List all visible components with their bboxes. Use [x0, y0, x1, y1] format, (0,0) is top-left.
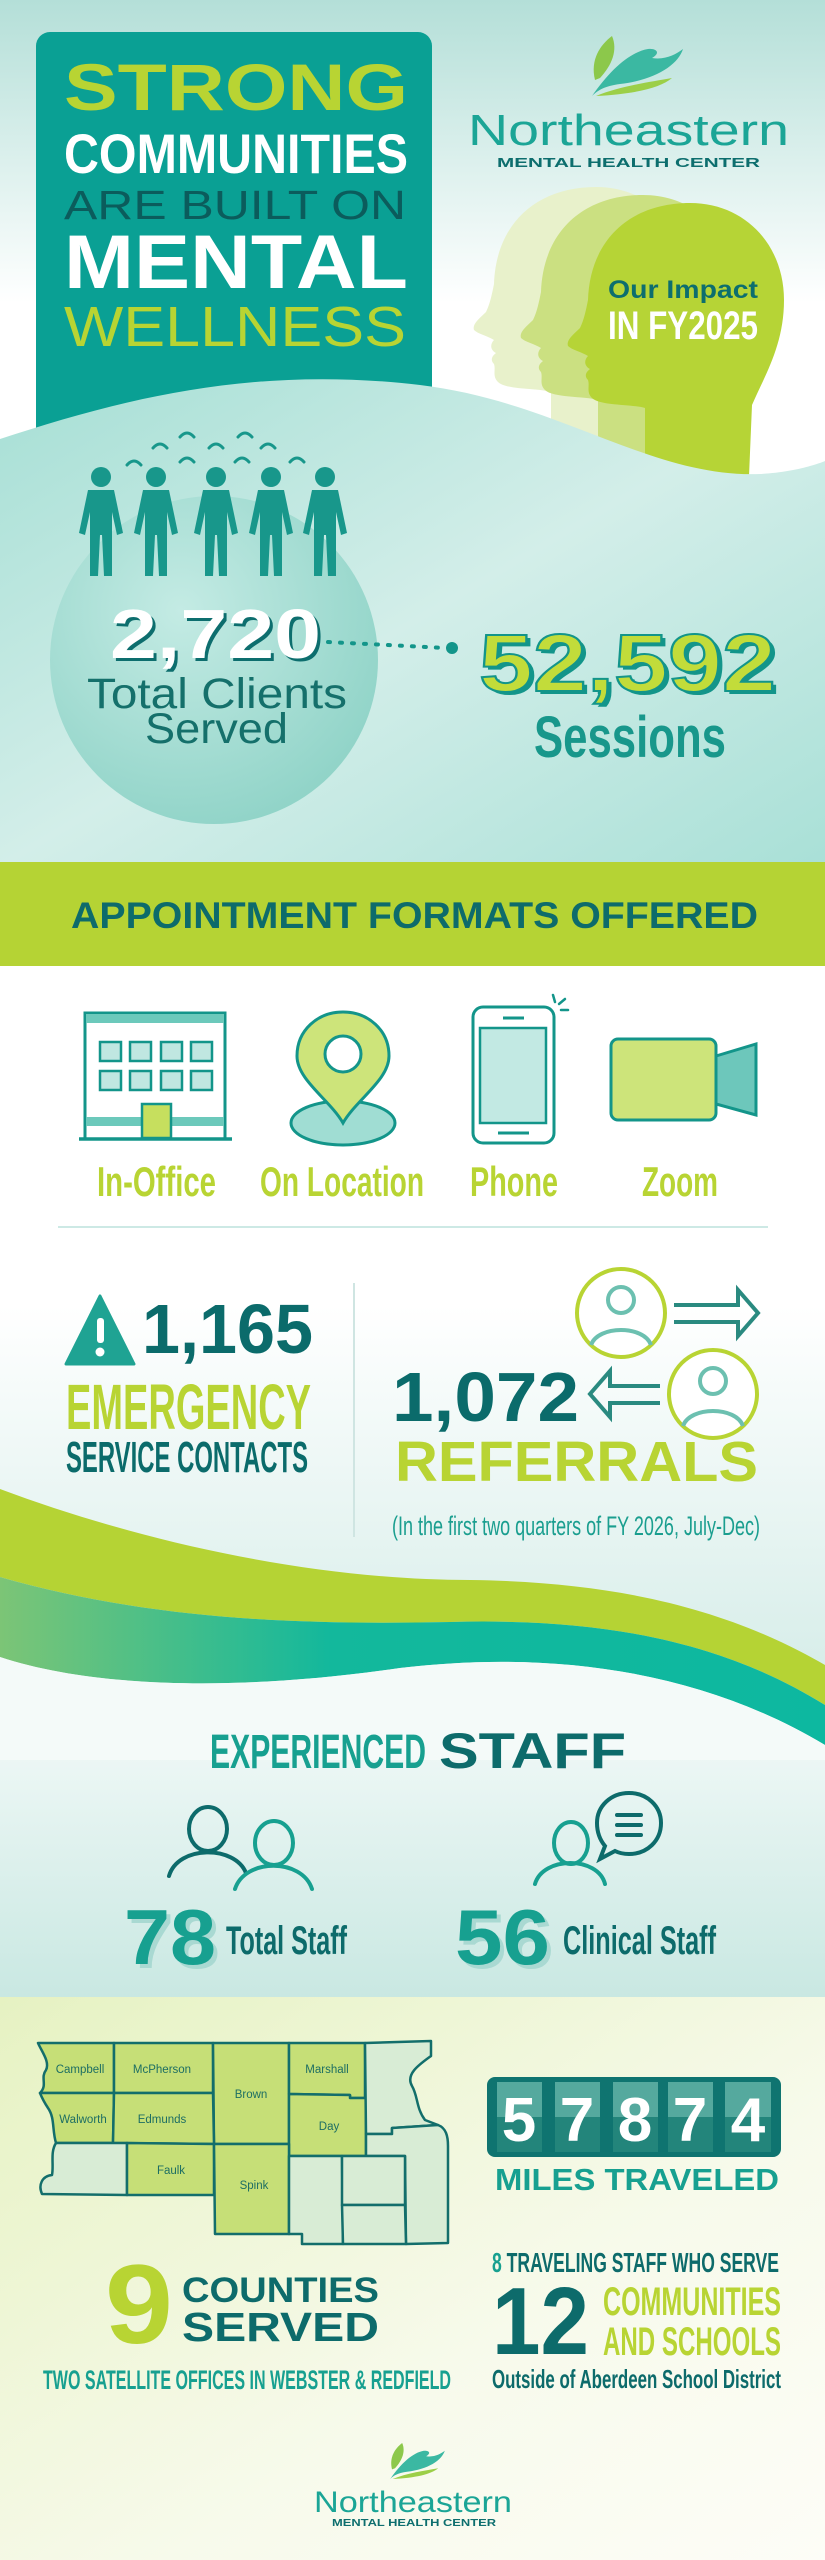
icon: referral exchange: [577, 1269, 758, 1438]
county map: Edmunds: [138, 2114, 187, 2126]
title panel: [36, 32, 432, 452]
traveling staff communities: 12: [492, 2268, 589, 2375]
staff heading: EXPERIENCED: [210, 1726, 426, 1779]
referrals stat: REFERRALS: [395, 1430, 758, 1494]
sessions stat: 52,592: [483, 621, 780, 712]
format labels: Phone: [470, 1158, 558, 1205]
county map: McPherson: [133, 2064, 191, 2076]
clients circle: Served: [145, 705, 288, 753]
icon: warning triangle: [66, 1296, 134, 1364]
staff heading: STAFF: [439, 1723, 626, 1779]
county map: Walworth: [59, 2114, 107, 2126]
title panel: MENTAL: [64, 220, 408, 305]
miles traveled odometer: 4: [731, 2086, 766, 2155]
logo top: [468, 36, 789, 170]
total staff: [124, 1807, 347, 1985]
miles traveled odometer: 7: [673, 2086, 707, 2155]
counties served: [43, 2242, 451, 2395]
title panel: WELLNESS: [64, 295, 406, 359]
total staff: Total Staff: [226, 1919, 347, 1963]
sessions stat: Sessions: [534, 705, 726, 770]
heads illustration: Our Impact: [608, 276, 759, 304]
format labels: [97, 1158, 718, 1205]
county map: Spink: [240, 2180, 269, 2192]
miles traveled odometer: 5: [502, 2086, 536, 2155]
staff background: [0, 1690, 825, 1997]
sessions stat: [479, 618, 780, 770]
dotted connector: [328, 642, 458, 654]
clinical staff: 56: [455, 1893, 550, 1981]
counties served: COUNTIES: [182, 2271, 379, 2310]
heading band: appointment formats: [0, 862, 825, 966]
icon: phone: [473, 995, 568, 1143]
icon: location pin: [291, 1012, 395, 1145]
title panel: STRONG: [64, 50, 408, 124]
emergency stat: 1,165: [142, 1290, 313, 1368]
format labels: On Location: [260, 1158, 424, 1205]
county map: Brown: [235, 2089, 267, 2101]
title panel: COMMUNITIES: [64, 122, 408, 185]
wave background: [0, 379, 825, 866]
heads illustration: IN FY2025: [608, 304, 758, 348]
icon: two people: [169, 1807, 312, 1889]
emergency stat: [66, 1290, 313, 1482]
bottom background: [0, 1997, 825, 2560]
counties served: 9: [105, 2242, 173, 2367]
miles traveled odometer: 8: [618, 2086, 652, 2155]
miles traveled odometer: MILES TRAVELED: [495, 2162, 779, 2197]
format labels: Zoom: [642, 1158, 718, 1205]
mid background: [0, 966, 825, 1306]
logo top: MENTAL HEALTH CENTER: [497, 155, 761, 170]
clinical staff: [455, 1793, 716, 1985]
county map: Day: [319, 2121, 339, 2133]
sessions stat: 52,592: [479, 618, 776, 709]
clinical staff: 56: [459, 1897, 554, 1985]
total staff: 78: [128, 1897, 220, 1985]
emergency stat: SERVICE CONTACTS: [66, 1433, 308, 1482]
county map: Faulk: [157, 2165, 185, 2177]
logo bottom: Northeastern: [314, 2486, 512, 2519]
logo bottom: [314, 2443, 512, 2529]
emergency stat: EMERGENCY: [66, 1371, 311, 1443]
clients circle: Total Clients: [87, 670, 347, 718]
clients circle: 2,720: [113, 598, 324, 676]
counties served: TWO SATELLITE OFFICES IN WEBSTER & REDFIELD: [43, 2365, 451, 2395]
clients circle: 2,720: [110, 595, 321, 673]
heading band: appointment formats: APPOINTMENT FORMATS OFFERED: [71, 895, 758, 936]
traveling staff communities: [492, 2247, 781, 2394]
clients circle: [50, 433, 378, 824]
clinical staff: Clinical Staff: [563, 1919, 716, 1963]
miles traveled odometer: 7: [560, 2086, 594, 2155]
icon: zoom camera: [611, 1039, 756, 1120]
heads illustration: [474, 187, 784, 500]
counties served: SERVED: [182, 2304, 379, 2350]
title panel: ARE BUILT ON: [64, 182, 406, 228]
county map: Campbell: [56, 2064, 104, 2076]
referrals stat: [392, 1269, 760, 1541]
miles traveled odometer: [487, 2077, 781, 2197]
logo bottom: MENTAL HEALTH CENTER: [332, 2518, 497, 2529]
county map: [38, 2041, 448, 2244]
total staff: 78: [124, 1893, 216, 1981]
background top: [0, 0, 825, 866]
referrals stat: 1,072: [392, 1358, 579, 1436]
format labels: In-Office: [97, 1158, 216, 1205]
logo top: Northeastern: [468, 106, 789, 155]
icon: in-office building: [79, 1013, 232, 1139]
county map: Marshall: [305, 2064, 349, 2076]
people icons: [79, 433, 347, 576]
icon: person with speech bubble: [535, 1793, 661, 1884]
decorative waves: [0, 1489, 825, 1760]
